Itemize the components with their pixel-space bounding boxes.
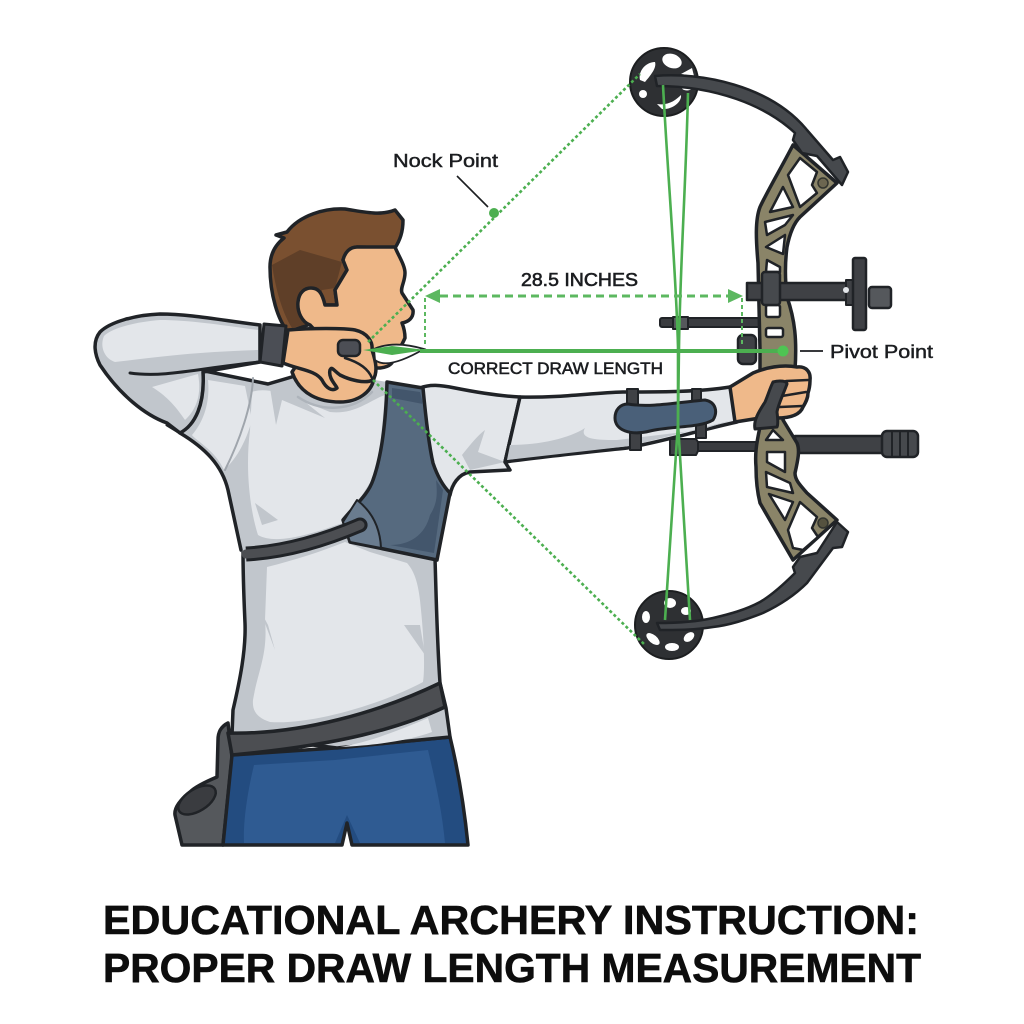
- neck: [292, 360, 374, 402]
- lower shirt torso: [232, 530, 450, 748]
- face: [298, 247, 413, 368]
- right forearm sleeve: [505, 387, 737, 462]
- archer figure: [95, 209, 737, 845]
- pivot point leader line: [800, 350, 823, 352]
- right shirt sleeve: [420, 385, 520, 495]
- sight arm rod: [660, 317, 760, 329]
- upper limb: [655, 75, 848, 185]
- lower limb: [657, 522, 848, 630]
- label: correct draw length: CORRECT DRAW LENGTH: [448, 360, 663, 378]
- rear stabilizer: [670, 439, 760, 455]
- quiver holster: [173, 723, 232, 845]
- label: draw length value: 28.5 INCHES: [521, 270, 638, 290]
- lower cam: [635, 591, 703, 659]
- chest strap: [246, 525, 360, 554]
- arrow shaft: [420, 349, 783, 353]
- drawing hand: [283, 328, 376, 390]
- drawing upper arm: [95, 314, 260, 433]
- riser cut-outs: [765, 158, 818, 550]
- hair: [270, 209, 403, 332]
- upper shirt torso: [180, 370, 450, 555]
- title: [103, 897, 921, 991]
- bow grip: [755, 381, 787, 429]
- sight assembly: [747, 258, 891, 330]
- trousers: [223, 737, 468, 845]
- title: PROPER DRAW LENGTH MEASUREMENT: [103, 945, 921, 991]
- bow strings: [663, 85, 690, 620]
- compound bow: [630, 48, 918, 659]
- lower dotted line: [373, 380, 645, 645]
- measurement dimension: [425, 289, 743, 347]
- label: pivot point: Pivot Point: [830, 341, 933, 362]
- pivot point marker: [778, 346, 788, 356]
- arrow fletching: [363, 344, 426, 363]
- bow hand: [730, 366, 810, 422]
- front stabilizer: [795, 431, 918, 457]
- head: [270, 209, 413, 368]
- label: nock point: Nock Point: [393, 150, 498, 171]
- title: EDUCATIONAL ARCHERY INSTRUCTION:: [103, 897, 919, 943]
- wrist band: [260, 324, 286, 366]
- chest guard vest: [343, 382, 450, 560]
- arm bracer: [615, 389, 716, 450]
- upper cam: [630, 48, 698, 116]
- arrow rest: [738, 335, 756, 364]
- riser: [756, 145, 837, 560]
- upper dotted line: [368, 74, 640, 342]
- waist belt: [228, 683, 445, 755]
- nock point marker: [489, 208, 499, 218]
- nock point leader line: [457, 176, 488, 207]
